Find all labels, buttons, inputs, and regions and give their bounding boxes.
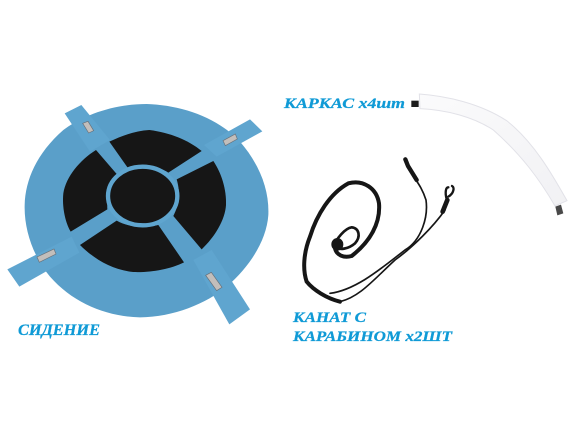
label: rope with carabiner: КАНАТ С	[292, 310, 367, 326]
seat disc	[25, 104, 268, 317]
strap slot	[83, 121, 94, 133]
label: rope with carabiner: КАРАБИНОМ x2ШТ	[292, 329, 453, 345]
label: frame: КАРКАС x4шт	[283, 96, 405, 112]
icon: curved white frame tube	[411, 94, 567, 215]
right loop end	[446, 186, 454, 199]
right rope knot	[443, 200, 447, 212]
centre ring	[108, 167, 177, 225]
thick rope loop	[304, 182, 379, 302]
label: rope with carabiner	[292, 310, 453, 345]
thin rope to upper end	[330, 175, 426, 293]
strap: top right	[204, 119, 262, 157]
label: seat: СИДЕНИЕ	[18, 322, 100, 339]
strap: bottom left	[7, 237, 79, 287]
icon: rope with carabiner	[304, 159, 454, 302]
black sector: bottom	[80, 221, 184, 272]
icon: round swing seat	[7, 104, 268, 324]
strap: top left	[65, 105, 110, 152]
black sector: top	[109, 130, 202, 173]
upper rope knot	[405, 159, 417, 180]
strap slot	[206, 272, 222, 291]
black connector	[411, 101, 419, 107]
metal connector	[555, 205, 563, 215]
carabiner knot	[332, 238, 343, 250]
strap slot	[37, 249, 56, 262]
strap: bottom right	[193, 250, 250, 324]
thin rope to right end	[340, 210, 445, 302]
strap slot	[223, 134, 237, 146]
tube body	[419, 94, 567, 206]
carabiner	[333, 227, 359, 249]
black sector: right	[173, 161, 226, 249]
black sector: left	[63, 150, 117, 232]
